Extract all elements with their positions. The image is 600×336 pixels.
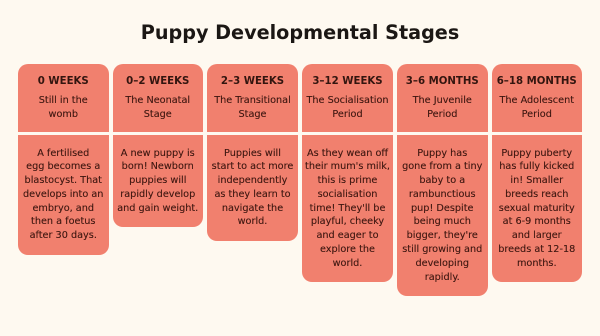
description: 6-18 months: breeds at 12-18 xyxy=(498,244,575,255)
description: 3-6 months xyxy=(397,135,488,296)
description: 2-3 weeks: Puppies will xyxy=(224,148,281,158)
description: 3-12 weeks: world. xyxy=(333,258,362,269)
description: 0-2 weeks xyxy=(112,135,203,226)
header: 3-6 months: Period xyxy=(427,109,457,120)
header: 3-6 months: The Juvenile xyxy=(413,95,472,106)
description: 3-12 weeks: their mum's milk, xyxy=(305,161,390,172)
description: 6-18 months xyxy=(492,135,582,282)
panel: 0-2 weeks xyxy=(113,64,203,227)
description: 2-3 weeks xyxy=(207,135,298,240)
header: 0 weeks: womb xyxy=(49,109,78,120)
description: 3-12 weeks xyxy=(302,135,393,282)
description: 0 weeks: egg becomes a xyxy=(26,161,100,172)
header: 6-18 months xyxy=(492,64,582,132)
description: 0 weeks: A fertilised xyxy=(37,148,89,158)
header: 3-12 weeks: Period xyxy=(332,109,363,120)
description: 0-2 weeks: A new puppy is xyxy=(121,148,195,158)
description: 3-12 weeks: playful, cheeky xyxy=(311,216,384,227)
panel: 2-3 weeks xyxy=(207,64,298,241)
description: 6-18 months: breeds reach xyxy=(505,189,568,200)
description: 0 weeks xyxy=(18,135,108,254)
header: 0-2 weeks: The Neonatal xyxy=(125,95,190,106)
description: 6-18 months: and larger xyxy=(512,230,562,241)
header: 6-18 months: Period xyxy=(522,109,552,120)
description: 3-12 weeks: this is prime xyxy=(318,175,377,186)
description: 0-2 weeks: puppies will xyxy=(129,175,186,186)
header: 0-2 weeks: 0–2 WEEKS xyxy=(126,76,189,87)
description: 0-2 weeks: rapidly develop xyxy=(120,189,195,200)
header: 2-3 weeks: The Transitional xyxy=(214,95,291,106)
description: 2-3 weeks: as they learn to xyxy=(214,189,291,200)
header: 3-6 months: 3–6 MONTHS xyxy=(406,76,479,87)
header: 0-2 weeks xyxy=(112,64,203,132)
description: 3-6 months: being much xyxy=(414,216,471,227)
description: 0 weeks: blastocyst. That xyxy=(25,175,102,186)
header: 0 weeks: 0 WEEKS xyxy=(38,76,89,87)
header: 3-12 weeks: The Socialisation xyxy=(306,95,389,106)
description: 3-6 months: developing xyxy=(415,258,469,269)
header: 2-3 weeks: Stage xyxy=(238,109,266,120)
description: 3-6 months: bigger, they're xyxy=(407,230,478,241)
description: 2-3 weeks: independently xyxy=(218,175,287,186)
header: 3-12 weeks: 3–12 WEEKS xyxy=(312,76,383,87)
description: 0-2 weeks: born! Newborn xyxy=(122,161,194,172)
panel: 3-6 months xyxy=(397,64,488,296)
description: 3-12 weeks: As they wean off xyxy=(307,148,388,158)
description: 6-18 months: at 6-9 months xyxy=(503,216,571,227)
header: 2-3 weeks xyxy=(207,64,298,132)
header: 0 weeks xyxy=(18,64,108,132)
description: 3-6 months: gone from a tiny xyxy=(402,161,482,172)
description: 3-6 months: still growing and xyxy=(402,244,482,255)
panel: 3-12 weeks xyxy=(302,64,393,282)
header: 0 weeks: Still in the xyxy=(39,95,88,106)
header: 0-2 weeks: Stage xyxy=(144,109,172,120)
description: 3-6 months: baby to a xyxy=(419,175,465,186)
panel: 0 weeks xyxy=(18,64,109,255)
description: 6-18 months: months. xyxy=(517,258,557,269)
description: 3-12 weeks: explore the xyxy=(320,244,375,255)
header: 3-12 weeks xyxy=(302,64,393,132)
header: 2-3 weeks: 2–3 WEEKS xyxy=(221,76,284,87)
panel: 6-18 months xyxy=(492,64,582,282)
header: 6-18 months: The Adolescent xyxy=(499,95,574,106)
description: 3-12 weeks: time! They'll be xyxy=(310,203,385,214)
description: 2-3 weeks: start to act more xyxy=(212,161,293,172)
header: 6-18 months: 6–18 MONTHS xyxy=(497,76,577,87)
description: 3-6 months: Puppy has xyxy=(417,148,467,158)
title: Puppy Developmental Stages xyxy=(141,21,459,44)
description: 0 weeks: develops into an xyxy=(23,189,103,200)
description: 3-6 months: rapidly. xyxy=(425,272,460,283)
description: 6-18 months: in! Smaller xyxy=(510,175,563,186)
description: 3-6 months: pup! Despite xyxy=(411,203,473,214)
description: 0 weeks: after 30 days. xyxy=(30,230,97,241)
description: 2-3 weeks: navigate the xyxy=(222,203,283,214)
description: 6-18 months: has fully kicked xyxy=(499,161,574,172)
description: 3-12 weeks: and eager to xyxy=(316,230,379,241)
description: 0 weeks: embryo, and xyxy=(32,203,94,214)
header: 3-6 months xyxy=(397,64,488,132)
description: 3-12 weeks: socialisation xyxy=(318,189,377,200)
description: 6-18 months: sexual maturity xyxy=(499,203,575,214)
description: 3-6 months: rambunctious xyxy=(409,189,476,200)
description: 0 weeks: then a foetus xyxy=(31,216,95,227)
description: 0-2 weeks: and gain weight. xyxy=(117,203,198,214)
description: 6-18 months: Puppy puberty xyxy=(501,148,572,158)
description: 2-3 weeks: world. xyxy=(238,216,267,227)
